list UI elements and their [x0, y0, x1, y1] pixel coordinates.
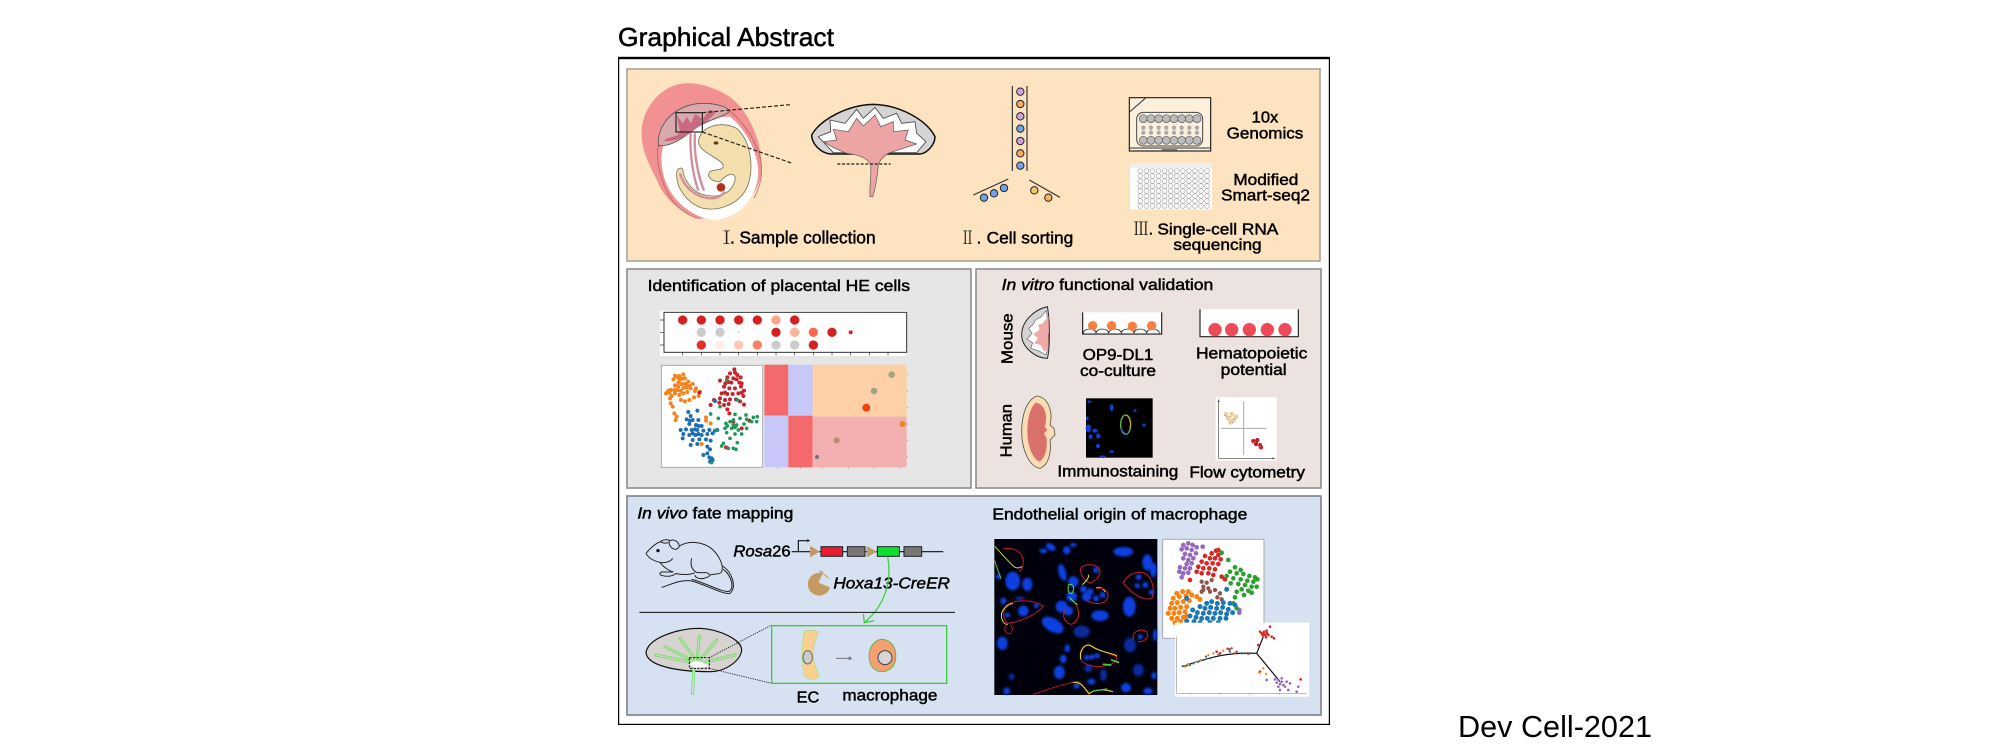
tSNE macrophage clusters: [1163, 539, 1264, 638]
panel: cell sorting and sequencing: [961, 86, 1310, 254]
panel: EC to macrophage: [772, 626, 947, 683]
icon: labelled placenta: [646, 625, 772, 693]
text: OP9-DL1 co-culture: co-culture: [1080, 363, 1156, 380]
panel: in vitro functional validation: [976, 269, 1321, 488]
heading: in vivo: In vivo fate mapping: [637, 505, 793, 522]
heading: HE cells: Identification of placental HE cells: [648, 278, 910, 295]
text: Flow cytometry: Flow cytometry: [1189, 464, 1305, 481]
panel: identification of placental HE cells: [627, 269, 971, 488]
icon: 10x chip: [1129, 98, 1211, 151]
icon: hematopoietic well: [1200, 309, 1298, 337]
flow cytometry plot: [1216, 397, 1277, 461]
icon: CreER: [808, 571, 830, 596]
text: Immunostaining: Immunostaining: [1057, 464, 1178, 481]
label: macrophage: macrophage: [842, 688, 937, 705]
outer frame: [618, 58, 1330, 725]
label: cell sorting: Cell sorting: [987, 228, 1073, 247]
label: sample collection: .: [730, 227, 735, 247]
icon: embryo in uterus: [642, 83, 792, 220]
text: Hematopoietic potential: [1196, 346, 1308, 379]
label: single-cell RNA sequencing: Ⅲ: [1133, 219, 1149, 239]
text: 10x Genomics: Genomics: [1227, 125, 1303, 142]
icon: 96-well plate: [1130, 163, 1212, 209]
gene construct: [733, 539, 943, 561]
tSNE scatter plot: [661, 365, 763, 467]
panel: in vivo fate mapping: [637, 505, 955, 706]
text: OP9-DL1 co-culture: OP9-DL1: [1083, 347, 1153, 364]
label: sample collection: Sample collection: [739, 227, 876, 247]
panel: endothelial origin of macrophage: [992, 506, 1309, 697]
label: single-cell RNA sequencing: Single-cell RNA: [1157, 221, 1279, 238]
text: 10x Genomics: 10x: [1252, 110, 1278, 127]
heading: in vitro: In vitro functional validation: [1002, 277, 1213, 294]
label: single-cell RNA sequencing: .: [1149, 221, 1153, 238]
text: Modified Smart-seq2: Modified: [1233, 172, 1298, 189]
label: Hoxa13-CreER: Hoxa13-CreER: [833, 575, 950, 592]
confocal image: [994, 539, 1157, 695]
label: sample collection: Ⅰ: [718, 228, 736, 248]
icon: mouse: [646, 540, 733, 593]
label: cell sorting: .: [977, 228, 981, 247]
gene construct: Rosa26: [733, 544, 791, 561]
quadrant scatter plot: [764, 365, 908, 469]
text: Modified Smart-seq2: [1221, 172, 1310, 205]
heading: endothelial origin: Endothelial origin of macrophage: [992, 506, 1247, 523]
icon: placenta section: [812, 104, 935, 197]
icon: sorting column: [973, 86, 1060, 201]
label: Mouse: Mouse: [1000, 313, 1017, 364]
title: Graphical Abstract: [618, 22, 835, 52]
text: Hematopoietic potential: Hematopoietic: [1196, 346, 1308, 363]
panel: experimental workflow background: [627, 69, 1320, 261]
pseudotime trajectory: [1175, 623, 1309, 697]
label: cell sorting: Ⅱ: [961, 228, 975, 248]
text: Hematopoietic potential: potential: [1221, 362, 1287, 379]
immunostaining image: [1086, 398, 1153, 458]
label: EC: EC: [797, 689, 819, 706]
icon: mouse placenta: [1022, 307, 1049, 358]
icon: OP9-DL1 well: [1083, 312, 1162, 334]
label: single-cell RNA sequencing: [1133, 219, 1279, 254]
graphical abstract figure: [618, 22, 1330, 725]
text: OP9-DL1 co-culture: [1080, 347, 1156, 380]
dot plot: [660, 311, 907, 356]
citation: Dev Cell-2021: [1458, 709, 1652, 744]
text: Modified Smart-seq2: Smart-seq2: [1221, 188, 1310, 205]
text: 10x Genomics: [1227, 110, 1303, 142]
panel: sample collection: [642, 83, 935, 248]
panel: fate mapping background: [627, 496, 1321, 715]
label: single-cell RNA sequencing: sequencing: [1173, 237, 1262, 254]
label: Human: Human: [998, 404, 1015, 457]
arrow: green recombination: [863, 557, 889, 623]
icon: human placenta: [1022, 396, 1055, 468]
